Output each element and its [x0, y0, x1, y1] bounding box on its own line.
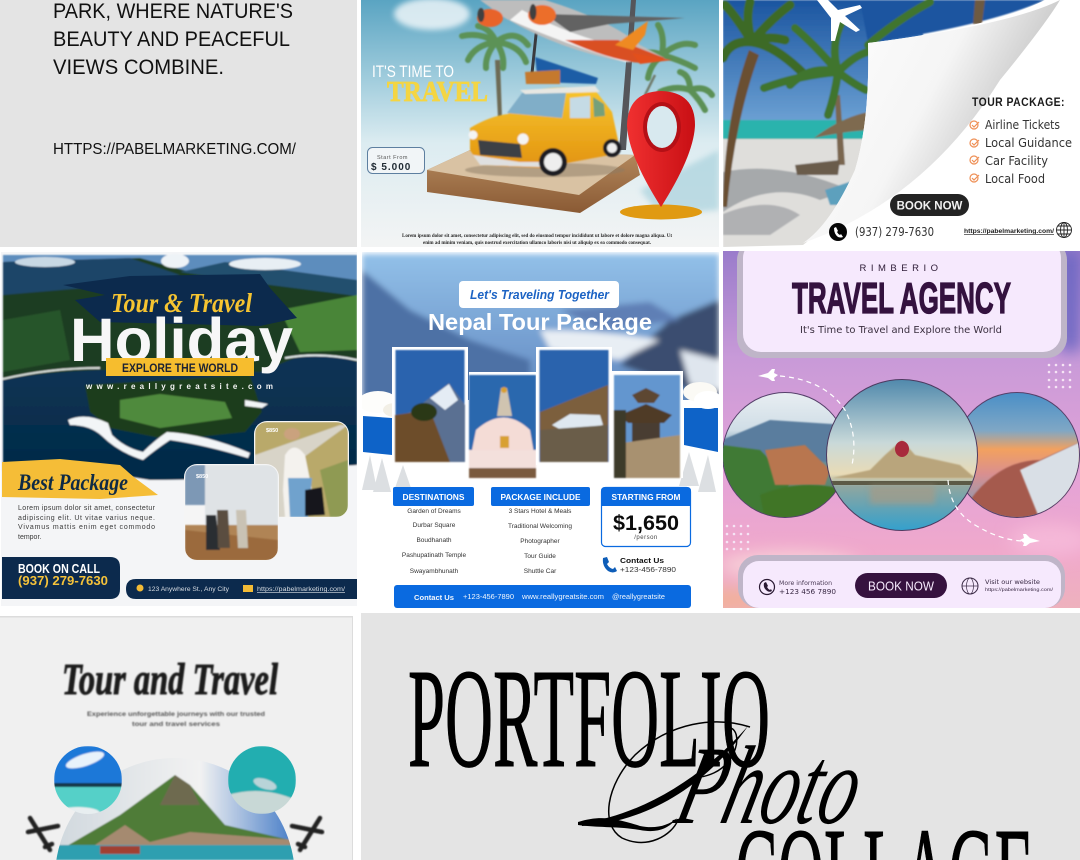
address bar: 123 Anywhere St., Any City [148, 586, 230, 593]
bottom contact bar [394, 585, 691, 608]
price tag: $ 5.000 [371, 162, 411, 173]
bottom info card: https://pabelmarketing.com/ [985, 587, 1054, 592]
circle photo: lagoon [54, 746, 122, 819]
photo: white stupa [469, 372, 536, 478]
yellow car [465, 57, 625, 177]
price tag: Start From [377, 155, 408, 161]
lorem text: Lorem ipsum dolor sit amet, consectetur [18, 505, 156, 512]
panel: tour and travel poster [0, 616, 354, 860]
dot patterns [726, 364, 1071, 550]
destinations list: DESTINATIONS [402, 493, 465, 502]
pale trees [362, 452, 716, 492]
photo: hikers [184, 464, 279, 561]
lorem text: Vivamus mattis enim eget commodo [18, 524, 155, 531]
explore banner: EXPLORE THE WORLD [122, 361, 238, 375]
package list: Airline Tickets [985, 118, 1060, 132]
bottom contact bar: www.reallygreatsite.com [521, 594, 604, 601]
photo script with flourish [578, 722, 877, 848]
bottom contact bar: @reallygreatsite [612, 594, 665, 601]
phone contact: (937) 279-7630 [855, 225, 934, 239]
lorem text [18, 505, 156, 541]
package include list: Tour Guide [524, 553, 556, 560]
bottom info card: More information [779, 580, 832, 587]
book on call box: (937) 279-7630 [18, 574, 108, 588]
photo: hikers: $850 [196, 474, 208, 480]
airplane [477, 0, 685, 64]
fine print [402, 234, 672, 246]
destinations list: Pashupatinath Temple [402, 552, 466, 559]
panel: beach tour package poster [723, 0, 1080, 249]
center photo: island mountain [50, 755, 300, 860]
intro paragraph [53, 0, 293, 79]
lorem text: adipiscing elit. Ut vitae varius neque. [18, 515, 155, 522]
photo: himalaya trail [392, 347, 468, 465]
price tag [368, 148, 424, 174]
panel: portfolio title [361, 613, 1080, 860]
tour and travel script: Tour & Travel [111, 288, 252, 318]
poster headline: IT'S TIME TO [372, 62, 454, 81]
contact [603, 556, 676, 574]
photo: alpine lake [536, 347, 612, 465]
circle photo: village [722, 392, 848, 520]
photo: woman walking [254, 421, 349, 518]
package list: Local Food [985, 172, 1045, 186]
panel: travel agency poster [670, 240, 1080, 610]
website: https://pabelmarketing.com/ [964, 228, 1054, 235]
package include list: PACKAGE INCLUDE [500, 493, 581, 502]
package include list: Shuttle Car [524, 568, 557, 575]
aerial photo [2, 254, 357, 481]
panel: nepal tour package poster [358, 252, 722, 610]
fine print: Lorem ipsum dolor sit amet, consectetur adipiscing elit, sed do eiusmod tempor incididunt ut labore et dolore magna aliqua. Ut [402, 234, 672, 239]
destinations list: Swayambhunath [410, 568, 459, 575]
bottom info card: BOOK NOW [868, 580, 934, 594]
bottom contact bar: +123-456-7890 [463, 594, 514, 601]
intro paragraph: PARK, WHERE NATURE'S [53, 0, 293, 23]
headline badge [459, 281, 619, 308]
phone contact [829, 223, 934, 241]
holiday title: Holiday [70, 306, 293, 374]
pole [619, 0, 636, 150]
tagline: Experience unforgettable journeys with our trusted [87, 711, 265, 718]
circle photo: santorini [954, 392, 1080, 520]
top title card: RIMBERIO [860, 263, 942, 274]
package list: TOUR PACKAGE: [972, 97, 1065, 109]
nepal title: Nepal Tour Package [428, 309, 652, 335]
website link: HTTPS://PABELMARKETING.COM/ [53, 141, 297, 158]
address bar [126, 579, 357, 599]
destinations list: Boudhanath [416, 537, 452, 544]
package include list [491, 487, 590, 575]
book now button: BOOK NOW [897, 200, 963, 212]
address bar: https://pabelmarketing.com/ [257, 586, 345, 593]
icon: right plane [292, 818, 322, 850]
clouds and blue brush [358, 382, 722, 455]
package list [970, 97, 1072, 186]
yellow brush with best package [2, 459, 158, 499]
bottom info card: Visit our website [985, 578, 1040, 586]
package include list: Traditional Welcoming [508, 523, 572, 530]
icon: left plane [28, 818, 58, 850]
explore banner [106, 358, 254, 376]
icon: plane [817, 0, 862, 41]
beach photo [723, 0, 1045, 249]
fine print: enim ad minim veniam, quis nostrud exercitation ullamco laboris nisi ut aliquip ex ea commodo consequat. [423, 241, 652, 246]
website [964, 222, 1072, 238]
starting price box: STARTING FROM [612, 493, 681, 502]
book on call box [2, 557, 120, 599]
flight paths and planes [758, 369, 1040, 546]
contact: Contact Us [620, 556, 664, 565]
photo: woman walking: $850 [266, 428, 278, 434]
mountain background [362, 252, 719, 400]
package include list: Photographer [520, 538, 561, 545]
photo script with flourish: Photo [665, 723, 877, 848]
destinations list [393, 487, 474, 575]
intro paragraph: VIEWS COMBINE. [53, 56, 224, 79]
script title: Tour and Travel [62, 655, 279, 704]
destinations list: Garden of Dreams [407, 508, 461, 515]
curled page [723, 0, 1080, 247]
tagline: tour and travel services [132, 721, 220, 728]
starting price box [601, 487, 691, 546]
tagline [87, 711, 265, 728]
package list: Local Guidance [985, 136, 1072, 150]
book now button [890, 194, 969, 216]
bottom contact bar: Contact Us [414, 595, 454, 602]
starting price box: $1,650 [613, 512, 679, 535]
sand platform [427, 150, 640, 213]
headline badge: Let's Traveling Together [470, 288, 610, 302]
contact: +123-456-7890 [620, 565, 676, 574]
package include list: 3 Stars Hotel & Meals [509, 508, 572, 515]
book on call box: BOOK ON CALL [18, 562, 100, 576]
panel: holiday poster [1, 252, 357, 606]
starting price box: /person [634, 535, 658, 541]
bottom info card: +123 456 7890 [779, 588, 836, 596]
poster headline: TRAVEL [387, 77, 488, 108]
panel: it's time to travel poster [361, 0, 719, 247]
package list: Car Facility [985, 154, 1048, 168]
palm trees [462, 25, 712, 135]
circle photo: parliament [825, 378, 980, 533]
panel: intro text [0, 0, 357, 247]
website: www.reallygreatsite.com [85, 382, 273, 391]
poster headline [373, 66, 488, 102]
lorem text: tempor. [18, 534, 41, 541]
destinations list: Durbar Square [413, 522, 456, 529]
bottom info card [738, 555, 1065, 608]
location pin [620, 91, 702, 220]
dark brush [63, 274, 297, 326]
yellow brush with best package: Best Package [17, 470, 128, 495]
photo: pagoda temple [612, 371, 683, 478]
top title card: It's Time to Travel and Explore the World [800, 325, 1002, 336]
intro paragraph: BEAUTY AND PEACEFUL [53, 28, 290, 51]
circle photo: boat [228, 746, 296, 814]
top title card [737, 240, 1067, 358]
